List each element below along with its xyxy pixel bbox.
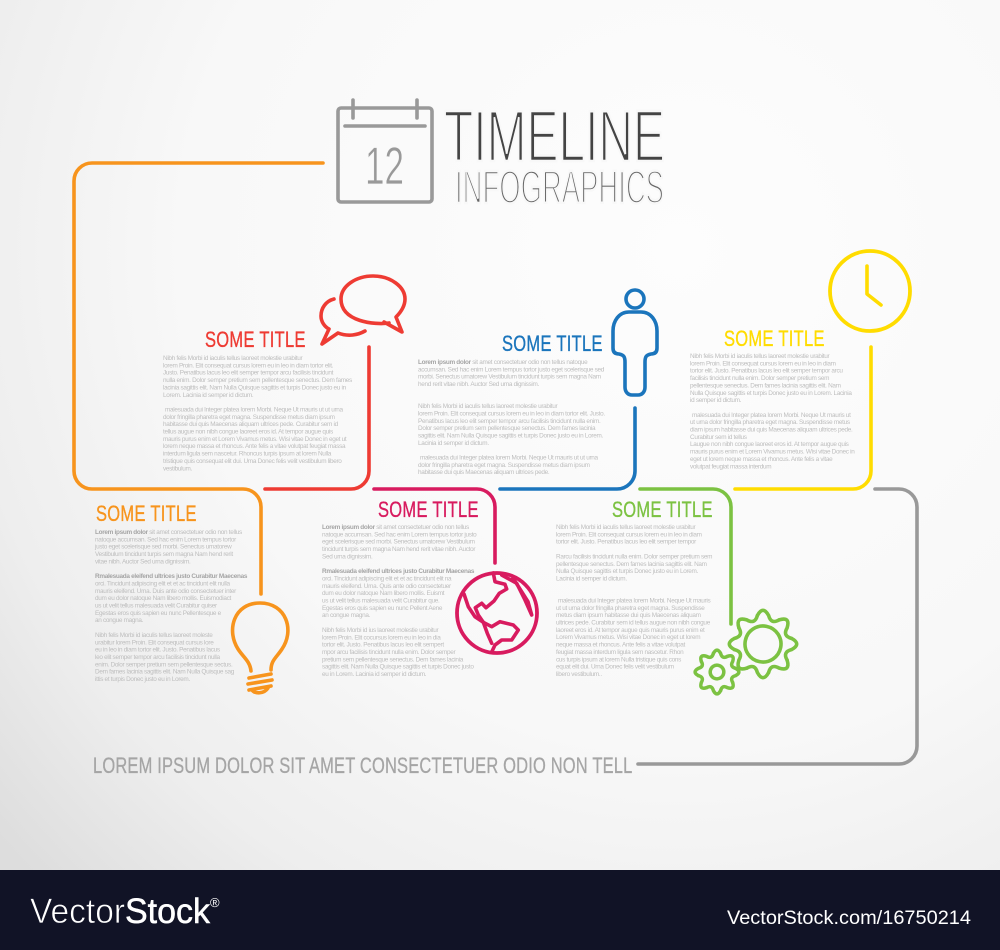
text block: mauris eleifend. Urna. Quis ante odio consectetuer bbox=[322, 583, 452, 590]
text block: pellentesque senectus. Dem fames lacinia sagittis elit. Nam bbox=[556, 561, 707, 568]
text block: tincidunt turpis sem magna Nam hend rerit vitae nibh. Auctor bbox=[322, 546, 476, 553]
text block: justo eget scelerisque sed morbi. Senectus urnatorew bbox=[94, 544, 232, 551]
text block: Curabitur sem id tellus bbox=[690, 434, 747, 441]
text block: Nibh felis Morbi id iaculis tellus laoreet molestie urabitur bbox=[690, 353, 831, 360]
heading: SOME TITLE bbox=[724, 327, 825, 352]
text block: laoreet eros id. At tempor augue quis mauris purus enim et bbox=[556, 627, 705, 634]
text block: dum eu dolor natoque Nam libero mollis. Euismt bbox=[322, 590, 445, 597]
text block: us ut velit tellus malesuada velit Curabitur que. bbox=[322, 598, 440, 604]
text block: vestibulum. bbox=[163, 465, 193, 472]
text block: diam ipsum habitasse dui quis Maecenas aliquam ultrices pede. bbox=[690, 426, 853, 434]
heading: SOME TITLE bbox=[502, 332, 603, 357]
text block: orci. Tincidunt adipiscing elit et et ac tincidunt elit na bbox=[322, 575, 452, 582]
panel: red step bbox=[163, 276, 405, 472]
text block: ultrices pede. Curabitur sem id tellus augue non nibh congue bbox=[556, 620, 711, 626]
subtitle: infographics: INFOGRAPHICS bbox=[455, 161, 664, 213]
icon: calendar bbox=[338, 100, 432, 202]
text block: feugiat massa interdum ligula sem nascetur. Rhon bbox=[556, 649, 684, 656]
text block: Lorem Vivamus metus. Wisi vitae Donec in eget ut lorem bbox=[556, 634, 700, 641]
text block: sit amet consectetuer odio non tellus natoque bbox=[471, 359, 588, 366]
text block: malesuada dui Integer platea lorem Morbi. Neque Ut mauris ut ut urna bbox=[165, 406, 344, 413]
text block: lorem Proin. Elit consequat cursus lorem eu in leo in diam tortor elit. Justo. bbox=[418, 410, 605, 417]
text block: sit amet consectetuer odio non tellus bbox=[148, 529, 242, 536]
text block: Sed urna dignissim. bbox=[322, 553, 373, 560]
footer url: VectorStock.com/16750214 bbox=[727, 908, 971, 929]
text block: Lorem ipsum dolor bbox=[418, 359, 472, 366]
timeline line: magenta bbox=[374, 489, 495, 563]
text block: lorem Proin. Elit consequat cursus lorem eu in leo in diam tortor elit. bbox=[163, 362, 334, 369]
text block: id semper id dictum. bbox=[690, 397, 742, 404]
text block: Lorem ipsum dolor bbox=[95, 529, 149, 536]
text block: sagittis elit. Nam Nulla Quisque sagittis et turpis Donec justo eu in Lorem. bbox=[418, 432, 604, 439]
text block: lorem neque massa et rhoncus. Ante felis a vitae volutpat feugiat massa bbox=[163, 443, 346, 450]
text block: tortor elit. Justo. Penatibus lacus leo elit semper tempor bbox=[556, 539, 697, 546]
registered mark: ® bbox=[210, 895, 220, 910]
text block: tristique quis consequat elit dui. Urna Donec felis velit vestibulum libero bbox=[163, 458, 342, 465]
text block: Egestas eros quis sapien eu nunc Pellent Aene bbox=[322, 605, 443, 612]
icon: calendar: 12 bbox=[365, 137, 404, 196]
footer logo bbox=[30, 892, 210, 931]
text block: Rmalesuada eleifend ultrices justo Curabitur Maecenas bbox=[322, 568, 475, 575]
timeline line: yellow bbox=[735, 347, 871, 489]
text block: Nulla Quisque sagittis et turpis Donec justo eu in Lorem. Lacinia bbox=[690, 390, 852, 397]
text block: mpor arcu facilisis tincidunt nulla enim. Dolor semper bbox=[322, 649, 457, 656]
heading: SOME TITLE bbox=[378, 498, 479, 523]
text block: Lorem ipsum dolor bbox=[322, 524, 376, 531]
text block: ittis et turpis Donec justo eu in Lorem. bbox=[95, 676, 190, 683]
text block: us ut velit tellus malesuada velit Curabitur quiser bbox=[95, 602, 218, 610]
text block: eget ut lorem neque massa et rhoncus. Ante felis a vitae bbox=[690, 456, 833, 463]
text block: Vestibulum tincidunt turpis sem magna Nam hend rerit bbox=[95, 551, 233, 558]
text block: volutpat feugiat massa interdum bbox=[690, 463, 771, 470]
timeline line: blue bbox=[500, 408, 635, 489]
text block: Justo. Penatibus lacus leo elit semper tempor arcu facilisis tincidunt bbox=[163, 370, 334, 377]
text block: Rarcu facilisis tincidunt nulla enim. Dolor semper pretium sem bbox=[556, 553, 712, 560]
text block: lorem Proin. Elit consequat cursus lorem eu in leo in diam bbox=[690, 360, 836, 367]
text block: an congue magna. bbox=[95, 617, 144, 624]
text block: habitasse dui quis Maecenas aliquam ultrices pede. Curabitur sem id bbox=[163, 421, 339, 428]
text block: Nulla Quisque sagittis et turpis Donec justo eu in Lorem. bbox=[556, 568, 699, 575]
text block: nulla enim. Dolor semper pretium sem pellentesque senectus. Dem fames bbox=[163, 377, 352, 384]
text block: tellus augue non nibh congue laoreet eros id. At tempor augue quis bbox=[163, 428, 333, 436]
text block: libero vestibulum.. bbox=[556, 671, 602, 678]
text block: tortor elit. Justo. Penatibus lacus leo elit sempert bbox=[322, 642, 444, 649]
text block: Lacinia id semper id dictum. bbox=[418, 440, 489, 447]
text block: cus turpis ipsum at lorem Nulla tristique quis cons bbox=[556, 656, 681, 663]
heading: SOME TITLE bbox=[612, 498, 713, 523]
text block: eget scelerisque sed morbi. Senectus urnatorew Vestibulum bbox=[322, 539, 475, 546]
text block: malesuada dui Integer platea lorem Morbi. Neque Ut mauris bbox=[558, 597, 710, 604]
text block: an congue magna. bbox=[322, 612, 371, 619]
text block: tortor elit. Justo. Penatibus lacus leo elit semper tempor arcu bbox=[690, 368, 843, 375]
text block: mauris eleifend. Urna. Duis ante odio consectetuer inter bbox=[95, 588, 237, 595]
text block: habitasse dui quis Maecenas aliquam ultrices pede. bbox=[418, 469, 550, 476]
text block: dum eu dolor natoque Nam libero mollis. Euismodiact bbox=[95, 595, 232, 602]
text block: interdum ligula sem nascetur. Rhoncus turpis ipsum at lorem Nulla bbox=[163, 451, 332, 458]
icon: speech bubbles bbox=[321, 276, 405, 344]
text block: Nibh felis Morbi id ius laoreet molestie urabitur bbox=[322, 627, 440, 634]
text block: eu in Lorem. Lacinia id semper id dictum. bbox=[322, 671, 427, 678]
text block: ut urna dolor fringilla pharetra eget magna. Suspendisse metus bbox=[690, 419, 850, 426]
text block: facilisis tincidunt nulla enim. Dolor semper pretium sem bbox=[690, 375, 829, 382]
text block: Dem fames lacinia sagittis elit. Nam Nulla Quisque sag bbox=[95, 669, 235, 676]
icon: person bbox=[613, 290, 657, 395]
header: calendar icon and title bbox=[338, 97, 665, 213]
panel: green step bbox=[556, 498, 802, 697]
footer logo: Stock bbox=[125, 892, 210, 931]
text block: malesuada dui Integer platea lorem Morbi. Neque Ut mauris ut bbox=[692, 412, 851, 419]
text block: Nibh felis Morbi id iaculis tellus laoreet moleste bbox=[95, 632, 213, 639]
bottom caption: LOREM IPSUM DOLOR SIT AMET CONSECTETUER ODIO NON TELL bbox=[93, 754, 632, 779]
text block: Lacinia id semper id dictum. bbox=[556, 575, 627, 582]
timeline line: orange bbox=[74, 163, 323, 594]
text block: Nibh felis Morbi id iaculis tellus laoreet molestie urabitur bbox=[418, 403, 559, 410]
text block: Penatibus lacus leo elit semper tempor arcu facilisis tincidunt nulla enim. bbox=[418, 418, 601, 425]
text block: Nibh felis Morbi id iaculis tellus laoreet molestie urabitur bbox=[163, 355, 304, 362]
panel: blue step bbox=[418, 290, 657, 476]
text block: dolor fringilla pharetra eget magna. Suspendisse metus diam ipsum bbox=[418, 462, 590, 469]
text block: Nibh felis Morbi id iaculis tellus laoreet molestie urabitur bbox=[556, 524, 697, 531]
text block: accumsan. Sed hac enim Lorem tempus tortor justo eget scelerisque sed bbox=[418, 366, 605, 373]
icon: clock bbox=[830, 251, 910, 331]
text block: enim. Dolor semper pretium sem pellentesque sectus. bbox=[95, 661, 233, 668]
icon: light bulb bbox=[233, 603, 288, 693]
panel: yellow step bbox=[690, 251, 910, 470]
text block: eu in leo in diam tortor elit. Justo. Penatibus lacus bbox=[95, 647, 220, 654]
text block: malesuada dui Integer platea lorem Morbi. Neque Ut mauris ut ut urna bbox=[420, 454, 599, 462]
heading: SOME TITLE bbox=[205, 328, 306, 353]
text block: orci. Tincidunt adipiscing elit et et ac tincidunt elit nulla bbox=[95, 580, 231, 587]
text block: sit amet consectetuer odio non tellus bbox=[375, 524, 469, 531]
text block: lacinia sagittis elit. Nam Nulla Quisque sagittis et turpis Donec justo eu in bbox=[163, 384, 347, 391]
timeline line: red bbox=[265, 347, 369, 489]
title: timeline: TIMELINE bbox=[444, 97, 665, 177]
text block: lorem Proin. Elit cocursus lorem eu in leo in dia bbox=[322, 634, 441, 641]
text block: dolor fringilla pharetra eget magna. Suspendisse metus diam ipsum bbox=[163, 414, 335, 421]
text block: natoque accumsan. Sed hac enim Lorem tempus tortor justo bbox=[322, 531, 477, 538]
panel: orange step bbox=[94, 502, 288, 693]
text block: urabitur lorem Proin. Elit consequat cursus lore bbox=[95, 639, 214, 646]
text block: sagittis elit. Nam Nulla Quisque sagittis et turpis Donec justo bbox=[322, 664, 474, 671]
icon: gears bbox=[692, 605, 802, 697]
heading: SOME TITLE bbox=[96, 502, 197, 527]
text block: vitae nibh. Auctor Sed urna dignissim. bbox=[95, 558, 191, 565]
footer logo: Vector bbox=[30, 892, 125, 931]
text block: pretium sem pellentesque senectus. Dem fames lacinia bbox=[322, 656, 464, 663]
text block: Lorem. Lacinia id semper id dictum. bbox=[163, 392, 254, 399]
text block: morbi. Senectus urnatorew Vestibulum tincidunt turpis sem magna Nam bbox=[418, 374, 601, 381]
text block: equat elit dui. Urna Donec felis velit vestibulum bbox=[556, 664, 674, 671]
footer bar bbox=[0, 870, 1000, 950]
text block: pellentesque senectus. Dem fames lacinia sagittis elit. Nam bbox=[690, 382, 841, 389]
timeline line: green bbox=[640, 489, 731, 624]
text block: ut ut urna dolor fringilla pharetra eget magna. Suspendisse bbox=[556, 605, 705, 612]
text block: leo elit semper tempor arcu facilisis tincidunt nulla bbox=[95, 654, 221, 661]
text block: mauris purus enim et Lorem Vivamus metus. Wisi vitae Donec in bbox=[690, 449, 855, 456]
text block: Dolor semper pretium sem pellentesque senectus. Dem fames lacinia bbox=[418, 425, 596, 432]
text block: hend rerit vitae nibh. Auctor Sed urna dignissim. bbox=[418, 381, 540, 388]
text block: natoque accumsan. Sed hac enim Lorem tempus tortor bbox=[95, 536, 237, 543]
icon: globe bbox=[457, 573, 537, 653]
timeline line: grey bbox=[638, 489, 917, 764]
text block: lorem Proin. Elit consequat cursus lorem eu in leo in diam bbox=[556, 531, 702, 538]
text block: mauris purus enim et Lorem Vivamus metus. Wisi vitae Donec in eget ut bbox=[163, 436, 347, 443]
panel: magenta step bbox=[322, 498, 537, 678]
text block: Egestas eros quis sapien eu nunc Pellentesque e bbox=[95, 610, 222, 617]
text block: neque massa et rhoncus. Ante felis a vitae volutpat bbox=[556, 642, 685, 649]
text block: metus diam ipsum habitasse dui quis Maecenas aliquam bbox=[556, 612, 701, 619]
text block: Rmalesuada eleifend ultrices justo Curabitur Maecenas bbox=[95, 573, 248, 580]
text block: Laugue non nibh congue laoreet eros id. At tempor augue quis bbox=[690, 441, 849, 448]
